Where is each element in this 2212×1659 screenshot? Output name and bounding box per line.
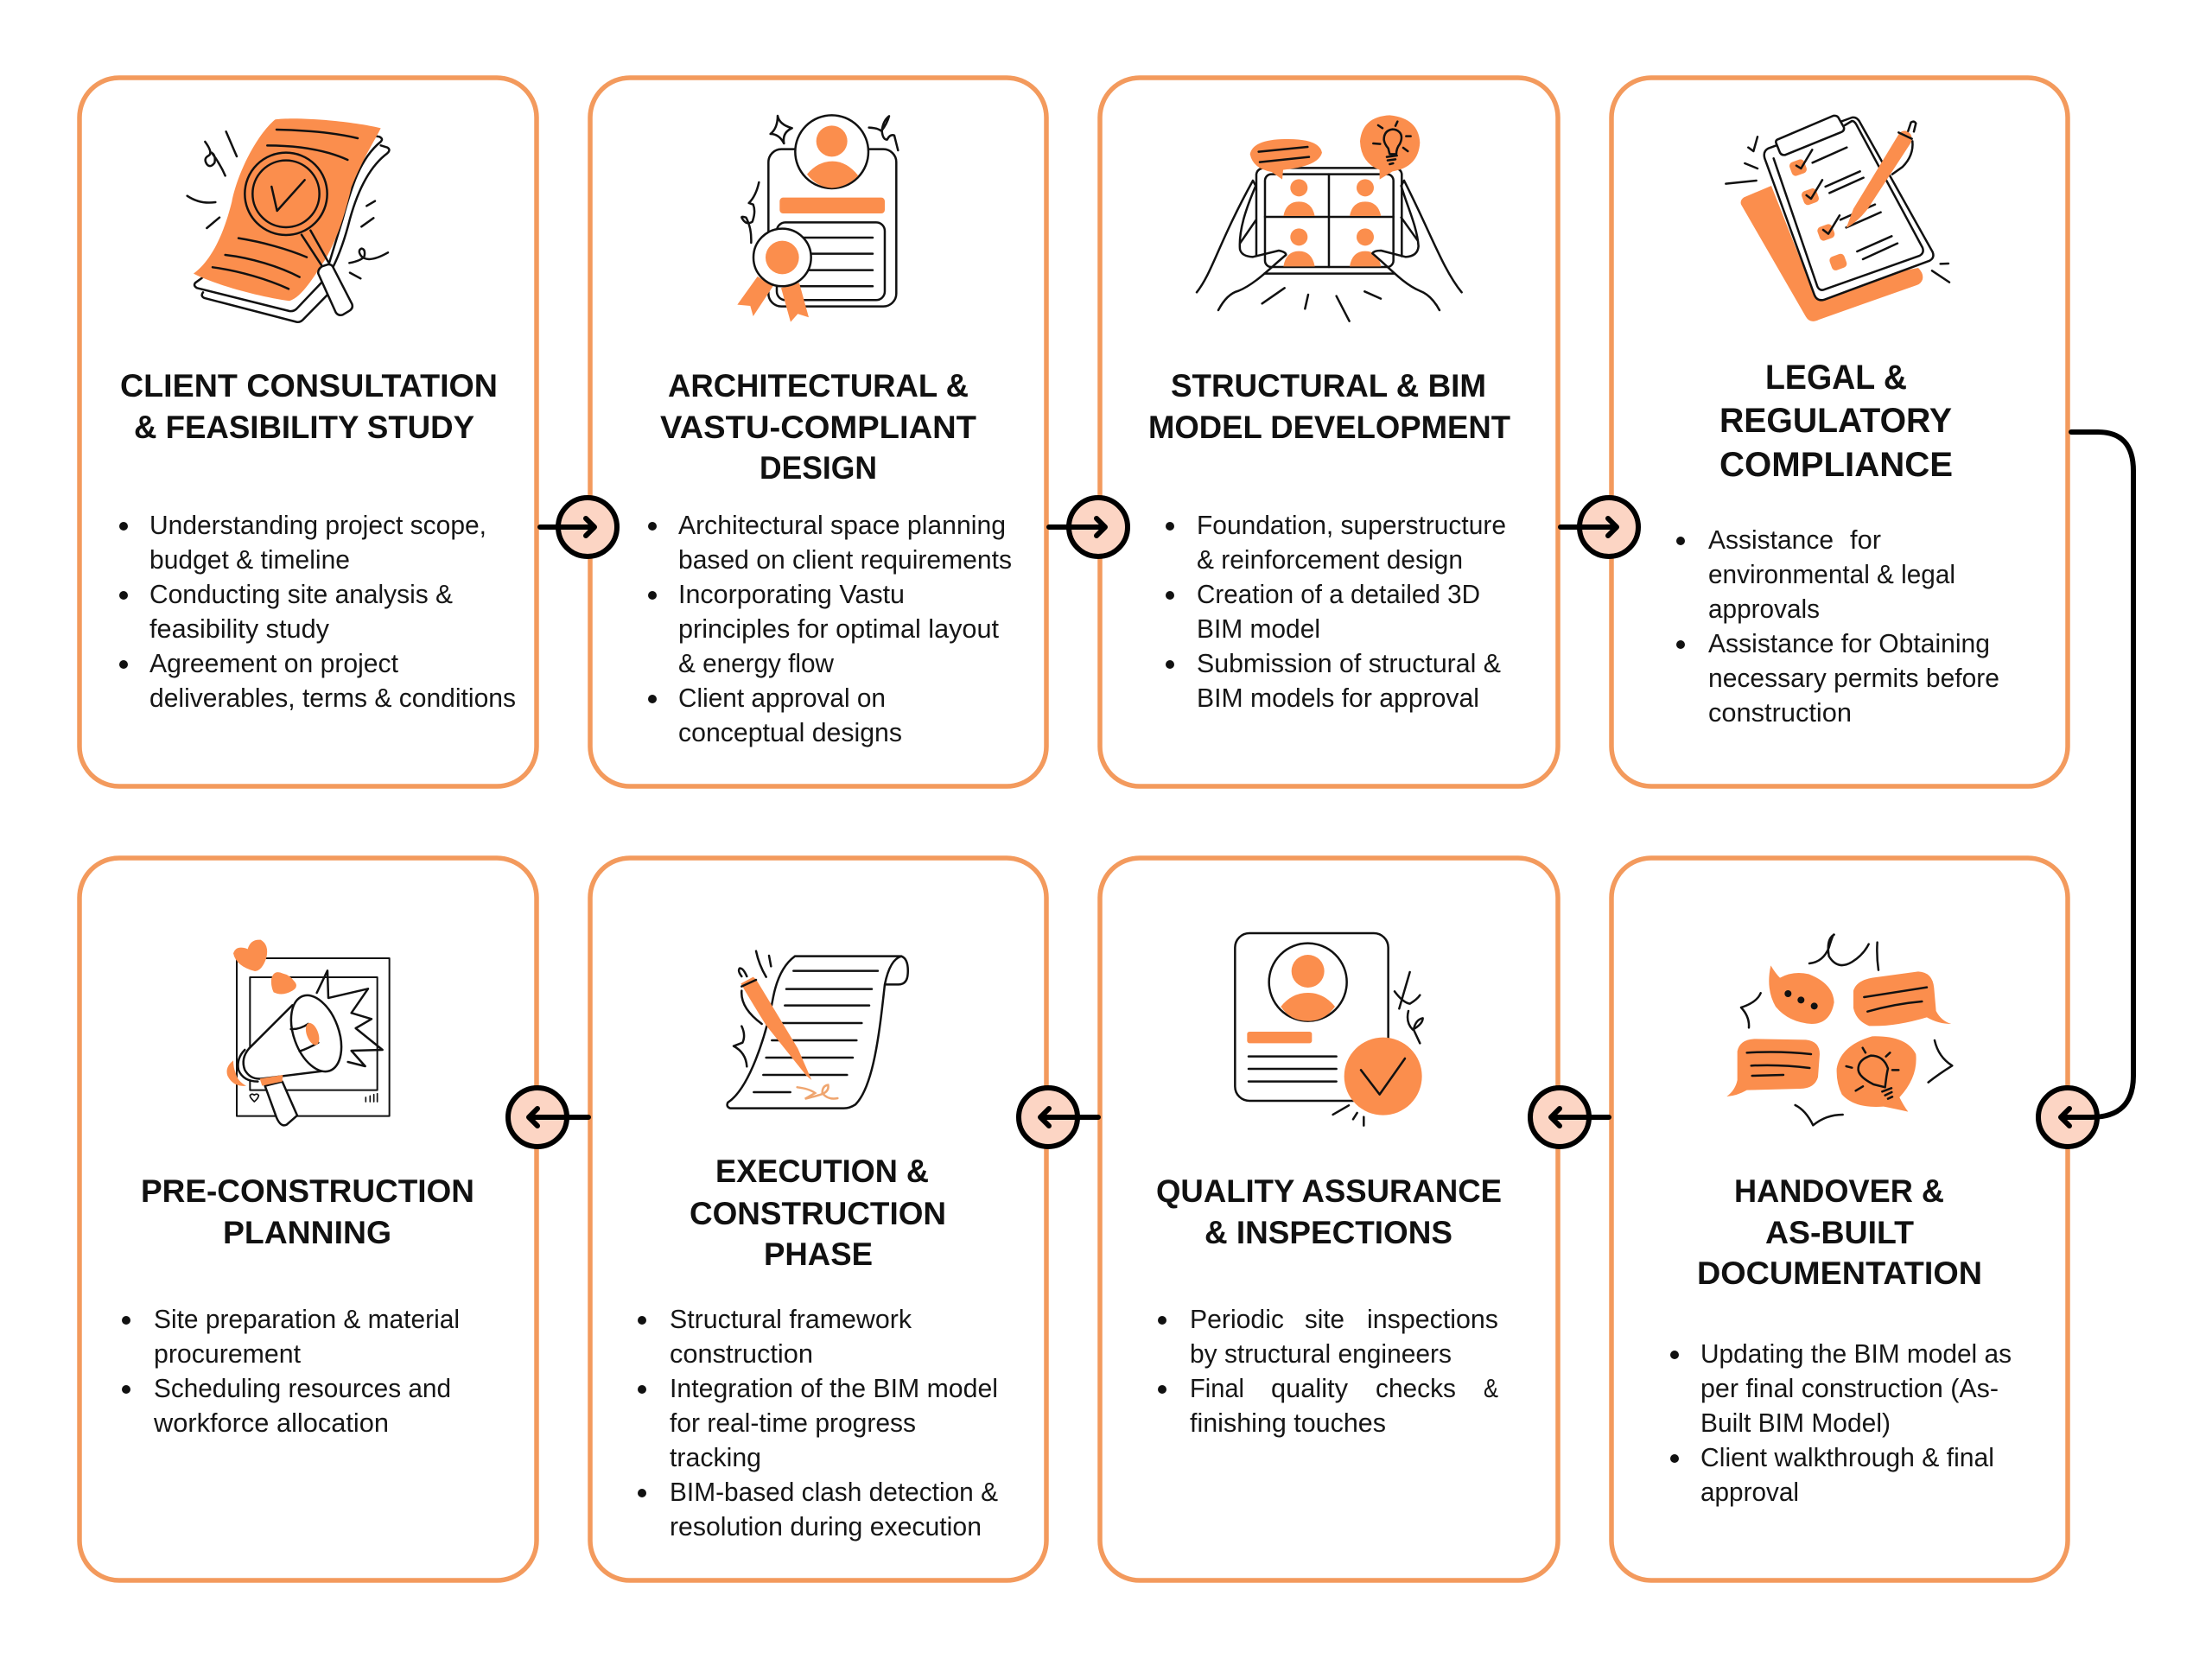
bullet list: finishing touches	[1190, 1408, 1386, 1438]
bullet list: procurement	[154, 1338, 301, 1369]
arrow: step 4 to 8 connector	[2038, 432, 2133, 1147]
bullet list: environmental & legal	[1708, 559, 1955, 589]
bullet list: Submission of structural &	[1197, 648, 1501, 678]
bullet list: principles for optimal layout	[678, 613, 999, 644]
bullet list: by structural engineers	[1190, 1338, 1452, 1369]
arrow: step 6 to 5	[508, 1088, 588, 1147]
bullet list: Assistance for Obtaining	[1708, 628, 1990, 658]
panel: pre-construction planning	[79, 858, 537, 1580]
icon: hands holding tablet	[1197, 115, 1462, 321]
heading: AS-BUILT	[1765, 1215, 1914, 1250]
bullet list: conceptual designs	[678, 717, 902, 747]
icon: approved profile card	[1235, 933, 1423, 1126]
icon: document with magnifier	[188, 118, 389, 322]
bullet list: workforce allocation	[153, 1408, 389, 1438]
bullet list: Incorporating Vastu	[678, 579, 905, 609]
bullet list: Conducting site analysis &	[149, 579, 453, 609]
arrow: step 7 to 6	[1019, 1088, 1098, 1147]
heading	[120, 368, 498, 445]
heading: HANDOVER &	[1734, 1173, 1944, 1209]
heading: LEGAL &	[1765, 359, 1907, 397]
bullet list: construction	[1708, 697, 1852, 728]
panel: handover documentation	[1611, 858, 2068, 1580]
icon: profile certificate	[737, 115, 898, 322]
heading: MODEL DEVELOPMENT	[1148, 410, 1510, 445]
heading	[1156, 1173, 1502, 1250]
bullet list: Final	[1190, 1373, 1244, 1403]
bullet list: Client walkthrough & final	[1700, 1442, 1994, 1472]
bullet list: Assistance	[1708, 524, 1834, 555]
heading: VASTU-COMPLIANT	[660, 410, 976, 445]
bullet list: approval	[1700, 1477, 1799, 1507]
bullet list: Integration of the BIM model	[670, 1373, 998, 1403]
bullet list: site	[1305, 1304, 1344, 1334]
arrow: step 8 to 7	[1530, 1088, 1609, 1147]
bullet list: & energy flow	[678, 648, 835, 678]
bullet list	[1676, 524, 1999, 728]
icon: clipboard checklist with pen	[1726, 116, 1949, 321]
heading: PLANNING	[223, 1215, 391, 1250]
panel: quality assurance	[1100, 858, 1558, 1580]
bullet list: Architectural space planning	[678, 510, 1006, 540]
bullet list: construction	[670, 1338, 813, 1369]
heading: & INSPECTIONS	[1205, 1215, 1452, 1250]
heading: EXECUTION &	[715, 1154, 929, 1189]
bullet list	[648, 510, 1012, 747]
panel: structural and BIM	[1100, 78, 1558, 786]
bullet list: Client approval on	[678, 683, 886, 713]
arrow: step 1 to 2	[540, 498, 617, 556]
bullet list: based on client requirements	[678, 544, 1012, 575]
heading	[1719, 359, 1953, 484]
heading: COMPLIANCE	[1719, 446, 1953, 484]
bullet list: deliverables, terms & conditions	[149, 683, 516, 713]
bullet list: BIM model	[1197, 613, 1320, 644]
bullet list: Structural framework	[670, 1304, 912, 1334]
heading: QUALITY ASSURANCE	[1156, 1173, 1502, 1209]
bullet list: approvals	[1708, 594, 1820, 624]
icon: scroll and pen	[728, 951, 908, 1109]
bullet list: for	[1850, 524, 1881, 555]
bullet list	[638, 1304, 998, 1541]
heading	[690, 1154, 946, 1272]
heading: STRUCTURAL & BIM	[1171, 368, 1486, 404]
bullet list: Understanding project scope,	[149, 510, 486, 540]
heading: DESIGN	[760, 450, 877, 486]
arrow: step 3 to 4	[1560, 498, 1638, 556]
heading	[141, 1173, 474, 1250]
heading: CONSTRUCTION	[690, 1196, 946, 1231]
bullet list: per final construction (As-	[1700, 1373, 1999, 1403]
heading	[1148, 368, 1510, 445]
bullet list: Periodic	[1190, 1304, 1284, 1334]
heading: CLIENT CONSULTATION	[120, 368, 498, 404]
heading: DOCUMENTATION	[1697, 1255, 1982, 1291]
panel: architectural design	[590, 78, 1046, 786]
heading: & FEASIBILITY STUDY	[134, 410, 474, 445]
bullet list: necessary permits before	[1708, 663, 1999, 693]
panel: client consultation	[79, 78, 537, 786]
bullet list	[1670, 1338, 2012, 1507]
heading: ARCHITECTURAL &	[668, 368, 969, 404]
bullet list: Foundation, superstructure	[1197, 510, 1506, 540]
bullet list: feasibility study	[149, 613, 329, 644]
bullet list: Agreement on project	[149, 648, 398, 678]
bullet list: BIM-based clash detection &	[670, 1477, 998, 1507]
bullet list: for real-time progress	[670, 1408, 916, 1438]
icon: megaphone poster	[226, 940, 390, 1125]
heading	[1697, 1173, 1982, 1291]
bullet list: Creation of a detailed 3D	[1197, 579, 1480, 609]
icon: speech bubbles	[1726, 935, 1952, 1125]
heading: PRE-CONSTRUCTION	[141, 1173, 474, 1209]
arrow: step 2 to 3	[1049, 498, 1128, 556]
bullet list: resolution during execution	[670, 1511, 982, 1541]
bullet list: budget & timeline	[149, 544, 350, 575]
bullet list: &	[1484, 1373, 1498, 1403]
panel: legal compliance	[1611, 78, 2068, 786]
bullet list: & reinforcement design	[1197, 544, 1463, 575]
bullet list	[119, 510, 516, 713]
bullet list: quality	[1271, 1373, 1348, 1403]
bullet list: checks	[1376, 1373, 1456, 1403]
bullet list: BIM models for approval	[1197, 683, 1479, 713]
bullet list: inspections	[1367, 1304, 1498, 1334]
bullet list: tracking	[670, 1442, 761, 1472]
bullet list: Built BIM Model)	[1700, 1408, 1891, 1438]
heading: REGULATORY	[1719, 402, 1952, 440]
heading: PHASE	[764, 1236, 873, 1272]
heading	[660, 368, 976, 486]
bullet list	[1166, 510, 1506, 713]
bullet list	[1158, 1304, 1498, 1438]
bullet list	[122, 1304, 460, 1438]
panel: execution and construction	[590, 858, 1046, 1580]
bullet list: Site preparation & material	[154, 1304, 460, 1334]
bullet list: Updating the BIM model as	[1700, 1338, 2012, 1369]
bullet list: Scheduling resources and	[154, 1373, 451, 1403]
